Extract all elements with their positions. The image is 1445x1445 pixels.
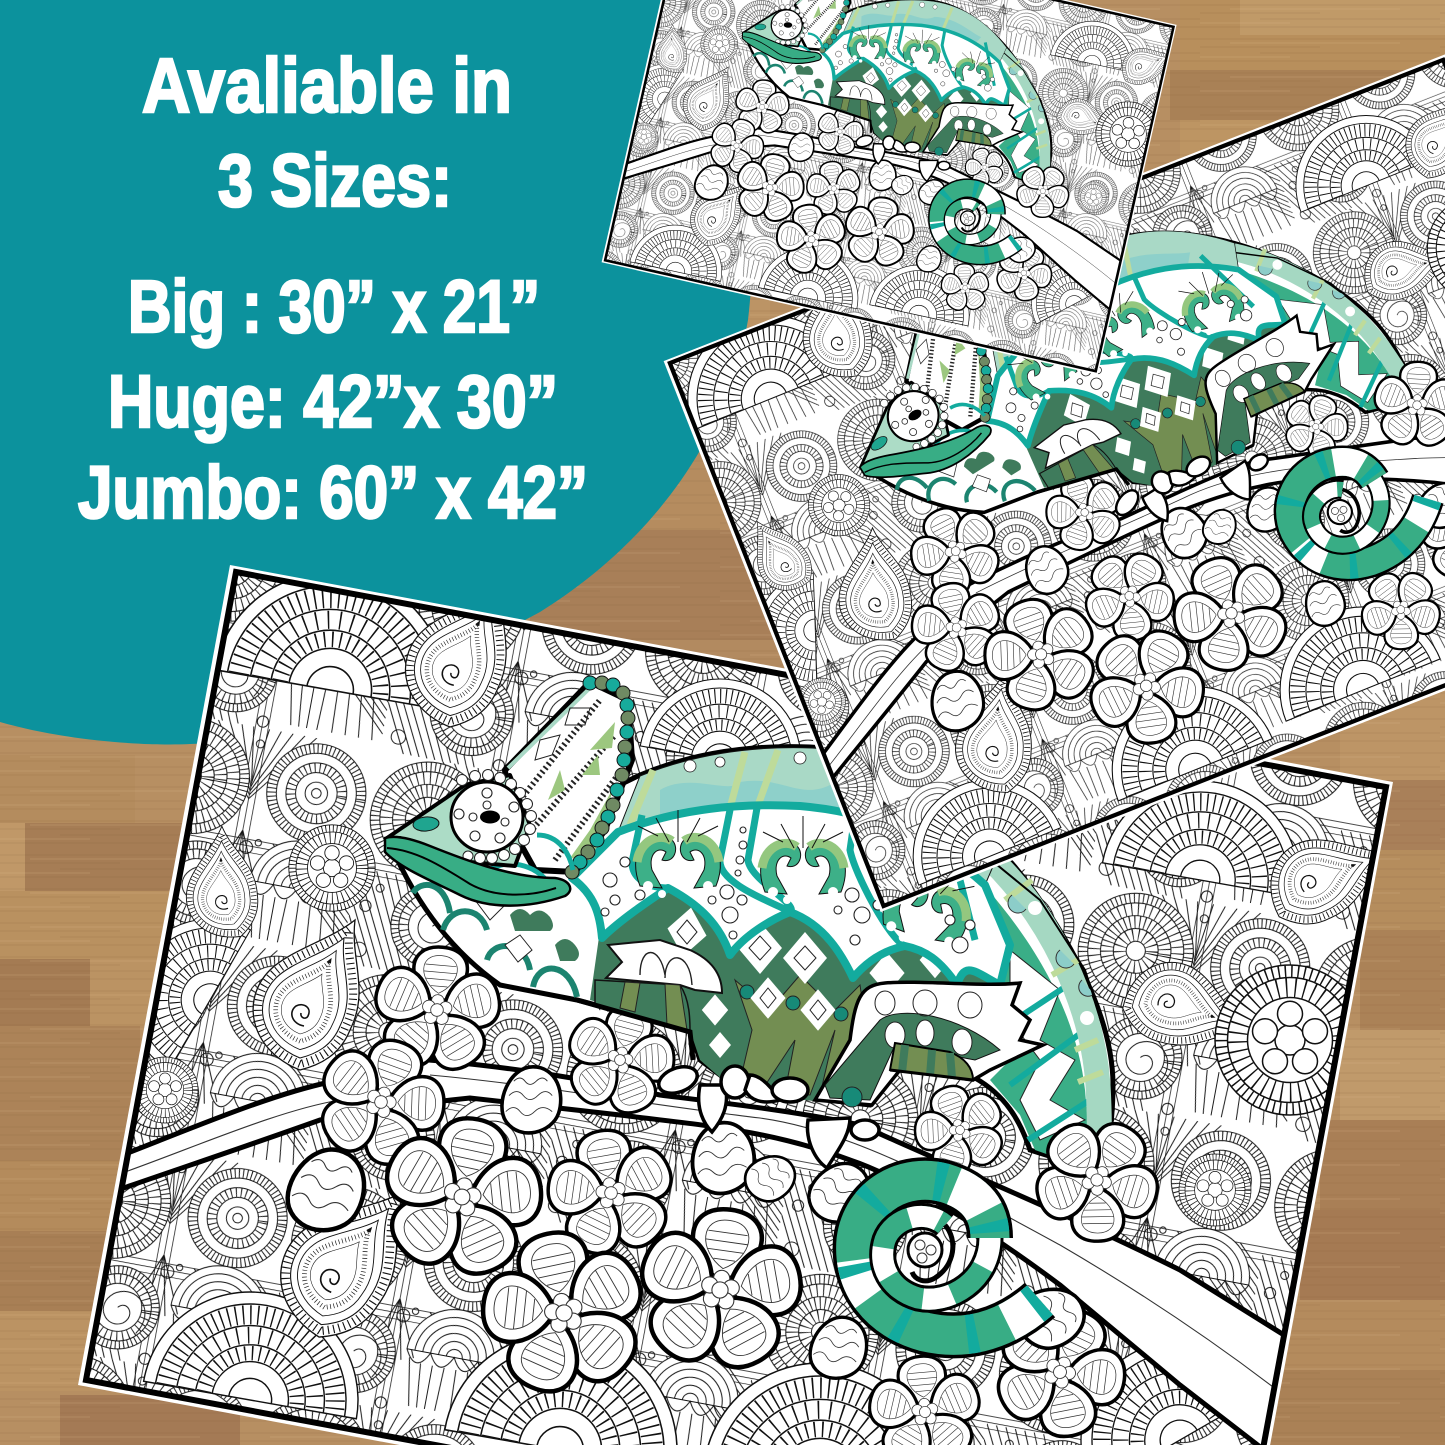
heading: availability: 3 Sizes:	[218, 139, 452, 222]
tail spiral	[856, 1180, 1040, 1335]
saddle band and lobes	[572, 748, 1010, 985]
dark flank	[590, 885, 1010, 1105]
size list	[78, 265, 588, 534]
size list: Big : 30” x 21”	[128, 265, 540, 348]
flower at tail tip	[1006, 1092, 1186, 1271]
branch	[112, 1058, 1300, 1445]
tail colour bands	[960, 855, 1108, 1170]
size list: Huge: 42”x 30”	[108, 360, 558, 443]
casque	[505, 682, 632, 872]
poster: jumbo, front	[40, 540, 1440, 1445]
neck scallops	[413, 885, 579, 997]
head	[385, 770, 570, 906]
cheek arcs	[487, 835, 573, 882]
black border	[86, 572, 1386, 1445]
eye	[451, 782, 523, 852]
rear leg	[815, 982, 1043, 1107]
crest beads	[565, 676, 635, 879]
heading: availability	[142, 43, 512, 222]
size list: Jumbo: 60” x 42”	[78, 451, 588, 534]
teal headline blob	[0, 0, 752, 744]
poster: huge, middle	[540, 0, 1445, 1068]
chameleon	[385, 676, 1186, 1335]
poster: big, top	[581, 0, 1201, 386]
flowers and pods	[280, 941, 1151, 1445]
front leg	[577, 940, 722, 1060]
doodle background	[40, 540, 1440, 1445]
chameleon body	[400, 747, 1113, 1172]
heading: availability: Avaliable in	[142, 43, 512, 129]
lips	[385, 837, 570, 906]
feet	[655, 1062, 879, 1168]
